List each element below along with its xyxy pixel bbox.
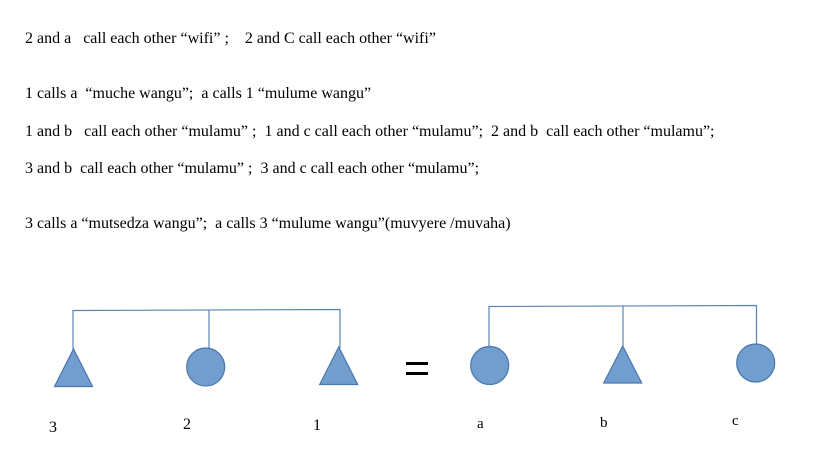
label: b: b (600, 415, 608, 431)
diagram: left sibling group (49, 310, 358, 436)
icon: circle for person 2 (187, 348, 225, 386)
label: c: c (732, 413, 739, 429)
text block: mutsedza relation: 3 calls a “mutsedza wangu”; a calls 3 “mulume wangu”(muvyere /muvaha) (25, 215, 511, 232)
text block: wifi relations: 2 and a call each other “wifi” ; 2 and C call each other “wifi” (25, 30, 436, 47)
label: 1: 1 (313, 417, 321, 434)
equals sign (406, 362, 428, 375)
connector: left sibling bracket (73, 310, 340, 350)
label: a: a (477, 416, 484, 432)
text block: mulamu relations for 3: 3 and b call each other “mulamu” ; 3 and c call each other “mulamu”; (25, 160, 479, 177)
connector: right sibling bracket (489, 306, 756, 347)
label: 3: 3 (49, 419, 57, 436)
icon: circle for person c (737, 344, 775, 382)
text block: mulamu relations for 1 and 2: 1 and b call each other “mulamu” ; 1 and c call each other “mulamu”; 2 and b call each other “mulamu”; (25, 123, 714, 140)
icon: triangle for person b (604, 346, 642, 383)
diagram: right sibling group (471, 306, 775, 432)
icon: triangle for person 1 (320, 347, 358, 384)
label: 2: 2 (183, 416, 191, 433)
icon: circle for person a (471, 346, 509, 384)
text block: muche wangu relation: 1 calls a “muche wangu”; a calls 1 “mulume wangu” (25, 85, 371, 102)
icon: triangle for person 3 (54, 349, 92, 386)
